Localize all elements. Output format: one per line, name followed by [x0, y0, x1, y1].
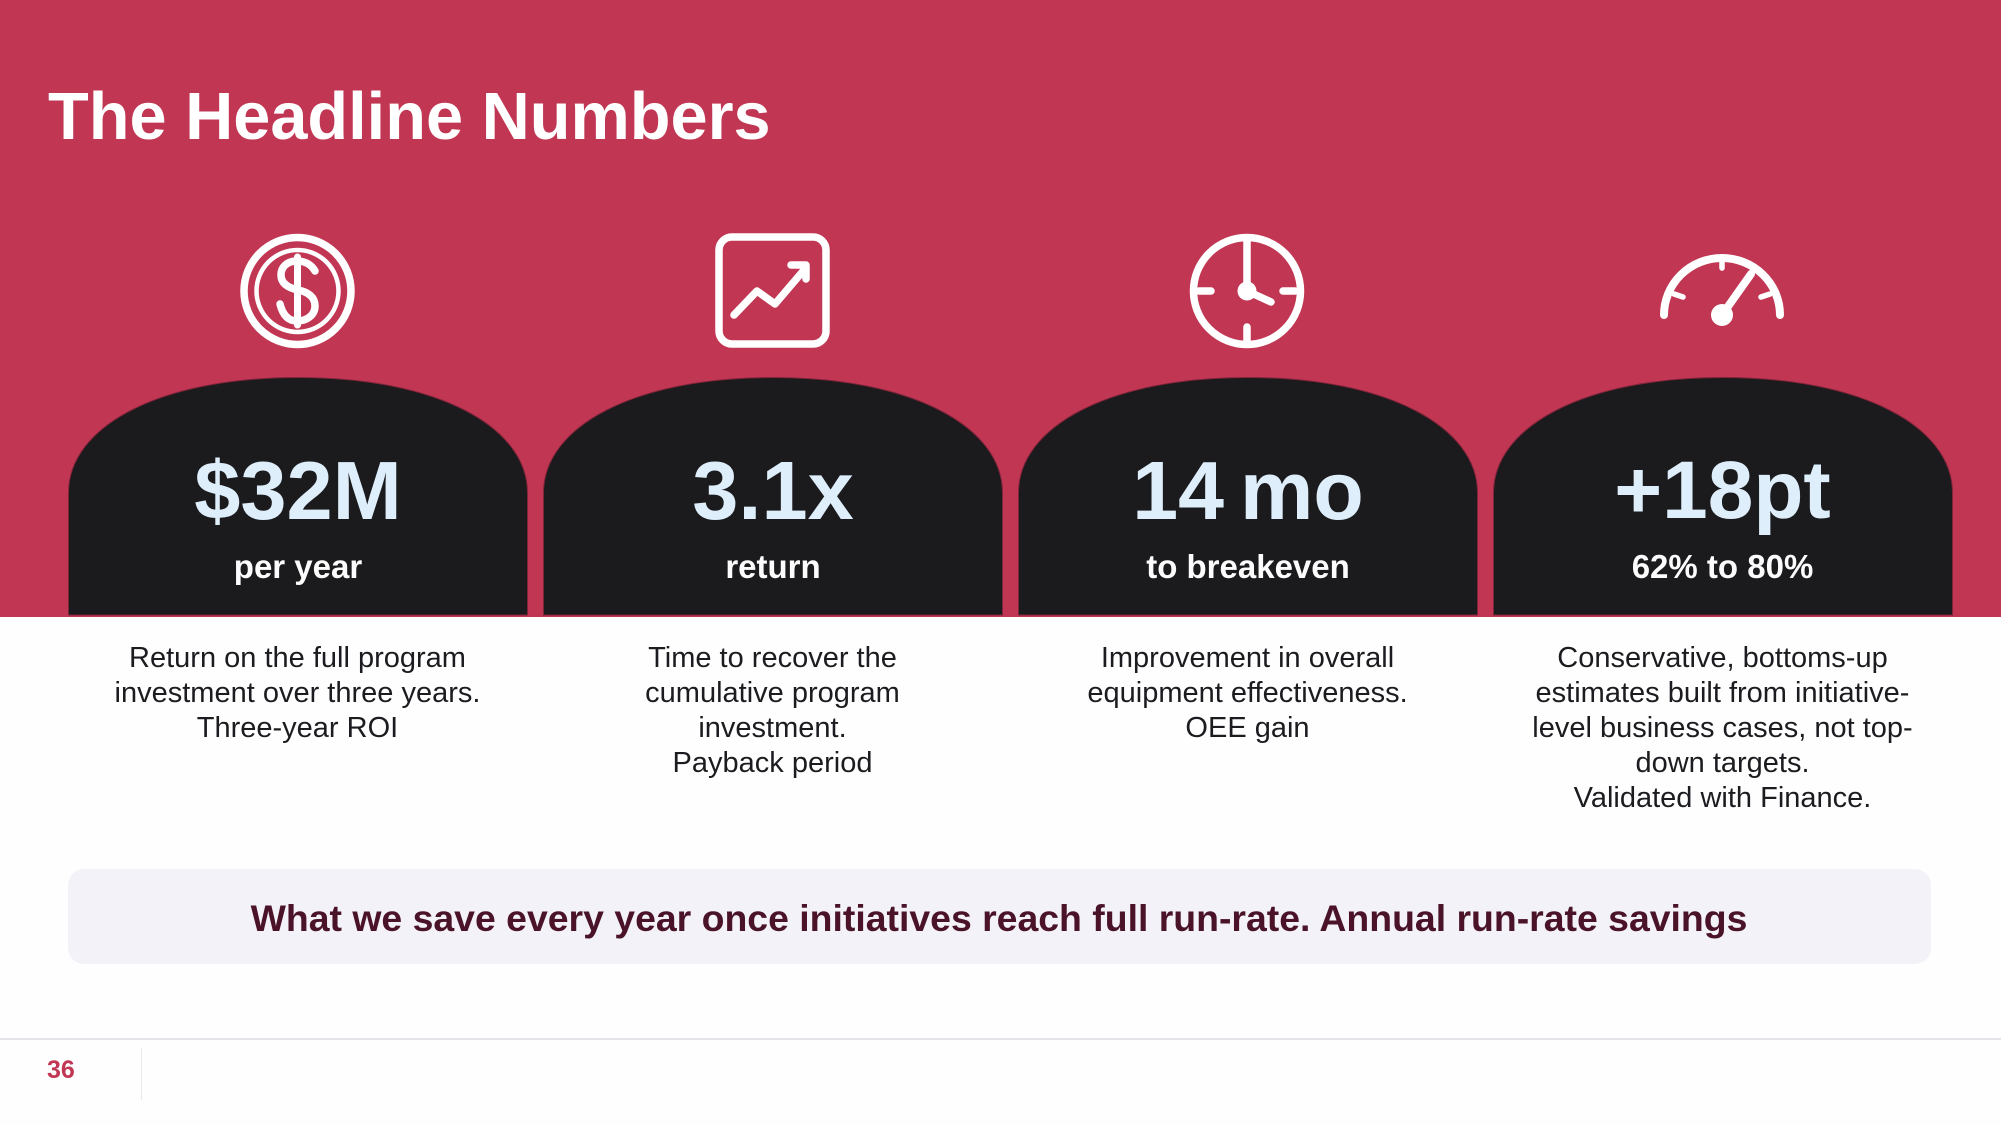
description: validation: Conservative, bottoms-up	[1557, 642, 1888, 674]
card: $32M: per year	[234, 548, 362, 585]
card: $32M: $32M	[194, 444, 402, 537]
card: +18pt: +18pt	[1614, 445, 1831, 536]
description: payback: Payback period	[673, 747, 872, 779]
card: 14 mo: to breakeven	[1146, 548, 1350, 585]
icon: gauge	[1660, 254, 1784, 326]
description: validation: level business cases, not top-	[1532, 712, 1913, 744]
callout banner	[68, 869, 1931, 964]
description: payback	[645, 642, 900, 779]
description: OEE: OEE gain	[1185, 712, 1310, 744]
footer rule	[0, 1038, 2001, 1040]
description: validation: Validated with Finance.	[1574, 782, 1871, 814]
icon: growth chart	[715, 233, 830, 348]
card: +18pt	[1493, 377, 1953, 616]
page number: 36	[47, 1056, 75, 1084]
description: OEE	[1087, 642, 1408, 744]
description: OEE: Improvement in overall	[1101, 642, 1394, 674]
card: 14 mo	[1018, 377, 1478, 616]
callout banner: What we save every year once initiatives reach full run-rate. Annual run-rate savings	[251, 897, 1747, 939]
icon: clock	[1190, 234, 1304, 348]
description: payback: cumulative program	[645, 677, 900, 709]
description: validation: down targets.	[1635, 747, 1810, 779]
description: OEE: equipment effectiveness.	[1087, 677, 1408, 709]
description: ROI	[115, 642, 480, 744]
title: The Headline Numbers	[48, 80, 771, 154]
card: +18pt: 62% to 80%	[1632, 548, 1813, 585]
card: 3.1x	[543, 377, 1003, 616]
description: payback: Time to recover the	[648, 642, 897, 674]
description: payback: investment.	[698, 712, 847, 744]
description: ROI: Three-year ROI	[197, 712, 398, 744]
card: 3.1x: return	[725, 548, 821, 585]
description: ROI: investment over three years.	[115, 677, 480, 709]
card: 14 mo: 14 mo	[1132, 445, 1364, 537]
description: ROI: Return on the full program	[129, 642, 466, 674]
description: validation: estimates built from initiative-	[1536, 677, 1909, 709]
description: validation	[1532, 642, 1913, 814]
card: $32M	[68, 377, 528, 616]
icon: dollar coin	[240, 234, 355, 348]
red header panel	[0, 0, 2001, 617]
card: 3.1x: 3.1x	[692, 444, 854, 537]
